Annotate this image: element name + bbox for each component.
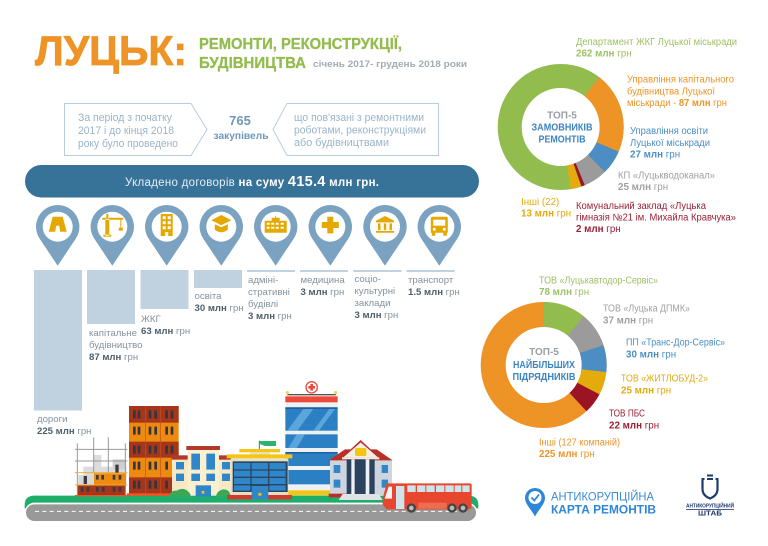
title block <box>35 27 467 74</box>
donut center title <box>512 347 576 383</box>
label: others: Інші (127 компаній) <box>539 438 620 448</box>
bar: transport: 1.5 млн грн <box>408 287 460 298</box>
central office building <box>227 441 292 499</box>
left box text: року було проведено <box>78 138 178 150</box>
right box text: або будівництвами <box>294 137 389 149</box>
label: education office: Луцької міськради <box>630 138 710 149</box>
pin: administrative building <box>254 205 297 266</box>
icon: tower shield <box>702 474 718 498</box>
bar: medicine <box>300 270 348 298</box>
label: Trans-Dor-Servis <box>626 338 725 360</box>
banner: total contracts <box>25 165 479 198</box>
donut chart: top 5 customers <box>510 37 737 235</box>
logo: anticorruption repair map <box>525 488 656 516</box>
label: water utility: КП «Луцькводоканал» <box>618 170 716 182</box>
donut ring <box>510 76 612 178</box>
bar: socio-cultural: 3 млн грн <box>354 310 398 321</box>
bar: administrative buildings: 3 млн грн <box>248 311 292 322</box>
bar: socio-cultural <box>354 270 402 321</box>
bar: administrative buildings <box>247 270 295 322</box>
donut center title: ТОП-5 <box>529 347 559 358</box>
label: PBS <box>609 408 659 432</box>
callout: purchases count <box>64 104 438 156</box>
pin: medicine <box>309 205 352 266</box>
pin: culture <box>363 205 407 266</box>
label: gymnasium: Комунальний заклад «Луцька <box>576 201 707 212</box>
label: education office: 27 млн грн <box>630 150 680 160</box>
bar: capital construction <box>87 270 142 363</box>
label: Lutsk DPMK: ТОВ «Луцька ДПМК» <box>603 304 691 314</box>
museum building <box>329 440 393 500</box>
label: Lutskavtodor-Servis: ТОВ «Луцькавтодор-Сервіс» <box>539 276 658 286</box>
label: capital construction office: міськради - 87 млн грн <box>627 98 727 109</box>
bar: education: освіта <box>194 291 222 302</box>
period note: січень 2017- грудень 2018 роки <box>313 59 467 70</box>
tall orange building <box>127 406 179 496</box>
label: Trans-Dor-Servis: 30 млн грн <box>626 350 676 360</box>
building under construction <box>75 437 128 496</box>
donut center title <box>532 110 592 146</box>
label: Trans-Dor-Servis: ПП «Транс-Дор-Сервіс» <box>626 338 725 348</box>
left box text <box>78 112 178 150</box>
bar: administrative buildings: стративні <box>248 287 290 298</box>
logo text: ШТАБ <box>698 508 723 518</box>
school building <box>169 446 232 497</box>
label: Lutskavtodor-Servis <box>539 276 658 298</box>
bar: capital construction: капітальне <box>89 328 137 339</box>
label: others: Інші (22) <box>521 197 559 208</box>
logo text <box>686 502 734 518</box>
pin: roads <box>36 205 79 266</box>
subtitle line 2: БУДІВНИЦТВА <box>199 55 306 72</box>
label: capital construction office <box>627 74 735 109</box>
label: others: 13 млн грн <box>521 208 571 220</box>
donut ring <box>493 314 594 416</box>
label: capital construction office: будівництва Луцької <box>627 86 715 98</box>
left box text: За період з початку <box>78 112 173 124</box>
donut center title: РЕМОНТІВ <box>538 134 586 146</box>
bar: roads: 225 млн грн <box>37 426 91 437</box>
label: PBS: 22 млн грн <box>609 420 659 432</box>
bar: socio-cultural: культурні <box>354 286 395 297</box>
label: Zhytlobud-2: ТОВ «ЖИТЛОБУД-2» <box>621 374 708 384</box>
label: others <box>539 438 620 460</box>
bar: socio-cultural: соціо- <box>354 274 381 285</box>
bar: administrative buildings: будівлі <box>248 299 278 310</box>
label: education office: Управління освіти <box>630 126 708 137</box>
bar: transport <box>406 270 460 298</box>
category pins <box>36 205 461 266</box>
label: housing department: Департамент ЖКГ Луцької міськради <box>576 37 737 48</box>
logo text: АНТИКОРУПЦІЙНИЙ <box>686 502 734 510</box>
label: water utility: 25 млн грн <box>618 182 668 193</box>
donut center title: НАЙБІЛЬШИХ <box>513 358 575 371</box>
label: others <box>521 197 571 220</box>
bar: education: 30 млн грн <box>194 303 244 314</box>
bar: roads: дороги <box>37 414 67 425</box>
label: housing department: 262 млн грн <box>576 48 632 60</box>
bar: administrative buildings: адміні- <box>248 275 278 286</box>
bar: housing services <box>140 270 190 337</box>
bar: transport: транспорт <box>408 275 454 286</box>
logo: anticorruption headquarters <box>686 474 734 518</box>
city illustration <box>25 382 478 522</box>
donut chart: top 5 contractors <box>493 276 725 460</box>
banner: total contracts: Укладено договорів на суму 415.4 млн грн. <box>125 174 379 190</box>
label: housing department <box>576 37 737 60</box>
label: Lutsk DPMK: 37 млн грн <box>603 316 653 326</box>
label: others: 225 млн грн <box>539 449 595 460</box>
left box text: 2017 і до кінця 2018 <box>78 125 174 137</box>
pin: education <box>200 205 243 266</box>
right box text <box>294 112 426 149</box>
label: gymnasium: гімназія №21 ім. Михайла Кравчука» <box>576 212 737 224</box>
bar: housing services: ЖКГ <box>141 314 161 325</box>
label: gymnasium <box>576 201 737 235</box>
label: gymnasium: 2 млн грн <box>576 224 621 235</box>
bar: housing services: 63 млн грн <box>141 326 190 337</box>
ground and road <box>25 496 478 522</box>
label: Lutsk DPMK <box>603 304 691 326</box>
bar: medicine: медицина <box>300 275 345 286</box>
logo: anticorruption repair map: КАРТА РЕМОНТІВ <box>551 502 656 516</box>
bar: medicine: 3 млн грн <box>300 287 344 298</box>
bar: socio-cultural: заклади <box>354 298 390 309</box>
label: Zhytlobud-2 <box>621 374 708 396</box>
label: Zhytlobud-2: 25 млн грн <box>621 386 671 396</box>
right box text: роботами, реконструкціями <box>294 124 426 136</box>
red bus <box>383 483 472 513</box>
bar: capital construction: 87 млн грн <box>89 352 138 363</box>
tall blue hospital <box>285 382 338 495</box>
right box text: що пов'язані з ремонтними <box>294 112 424 124</box>
title: city name: ЛУЦЬК: <box>35 27 187 74</box>
logo wordmark: АНТИКОРУПЦІЙНА <box>551 488 654 504</box>
label: Lutskavtodor-Servis: 78 млн грн <box>539 287 589 298</box>
label: water utility <box>618 170 716 193</box>
right arrow box <box>273 104 438 156</box>
label: capital construction office: Управління капітального <box>627 74 735 86</box>
donut center title: ЗАМОВНИКІВ <box>532 122 592 134</box>
pin: construction crane <box>91 205 134 266</box>
purchases word: закупівель <box>214 131 268 142</box>
donut center title: ТОП-5 <box>547 110 577 122</box>
bar: capital construction: будівництво <box>89 340 142 351</box>
purchases number: 765 <box>229 113 251 128</box>
spending bar chart <box>34 270 460 437</box>
left arrow box <box>64 104 207 156</box>
subtitle line 1: РЕМОНТИ, РЕКОНСТРУКЦІЇ, <box>199 36 402 53</box>
icon: map pin check <box>525 488 545 516</box>
label: PBS: ТОВ ПБС <box>609 408 645 420</box>
pin: transport <box>418 205 461 266</box>
bar: education <box>194 270 244 314</box>
bar: roads <box>34 270 91 437</box>
donut center title: ПІДРЯДНИКІВ <box>512 372 576 383</box>
pin: housing <box>145 205 188 266</box>
label: education office <box>630 126 710 160</box>
